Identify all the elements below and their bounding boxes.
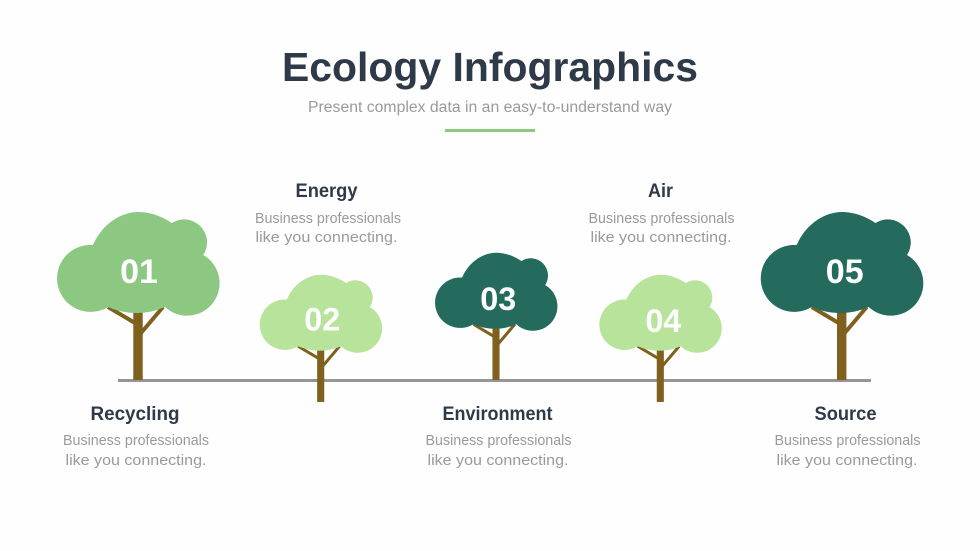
number 03: 03 bbox=[480, 281, 516, 317]
label: Environment: Environment bbox=[442, 404, 553, 425]
label: Air: like you connecting. bbox=[590, 230, 732, 246]
label: Recycling bbox=[63, 404, 209, 469]
tree 04 bbox=[599, 275, 722, 402]
label: Energy: Energy bbox=[296, 181, 358, 202]
tree 05 bbox=[761, 212, 923, 380]
label: Recycling: Business professionals bbox=[63, 433, 209, 449]
tree 03 bbox=[435, 253, 557, 380]
ground line bbox=[118, 379, 871, 382]
title: Ecology Infographics bbox=[282, 44, 698, 90]
title underline bbox=[445, 129, 535, 132]
label: Air: Business professionals bbox=[588, 211, 734, 227]
label: Air bbox=[588, 181, 734, 246]
label: Environment: Business professionals bbox=[426, 433, 572, 449]
tree 02 bbox=[260, 275, 382, 402]
label: Energy: like you connecting. bbox=[256, 230, 398, 246]
label: Source: Business professionals bbox=[774, 433, 920, 449]
subtitle: Present complex data in an easy-to-understand way bbox=[308, 99, 672, 116]
label: Air: Air bbox=[648, 181, 674, 202]
label: Energy bbox=[255, 181, 401, 246]
label: Energy: Business professionals bbox=[255, 211, 401, 227]
number 04: 04 bbox=[645, 303, 681, 339]
label: Source bbox=[774, 404, 920, 469]
label: Recycling: Recycling bbox=[90, 404, 180, 425]
label: Environment bbox=[426, 404, 572, 469]
tree 01 bbox=[57, 212, 220, 380]
label: Source: like you connecting. bbox=[776, 453, 918, 469]
number 05: 05 bbox=[826, 253, 864, 291]
label: Environment: like you connecting. bbox=[428, 453, 568, 469]
label: Recycling: like you connecting. bbox=[66, 453, 206, 469]
label: Source: Source bbox=[814, 404, 876, 425]
number 01: 01 bbox=[120, 253, 158, 291]
number 02: 02 bbox=[304, 301, 340, 337]
